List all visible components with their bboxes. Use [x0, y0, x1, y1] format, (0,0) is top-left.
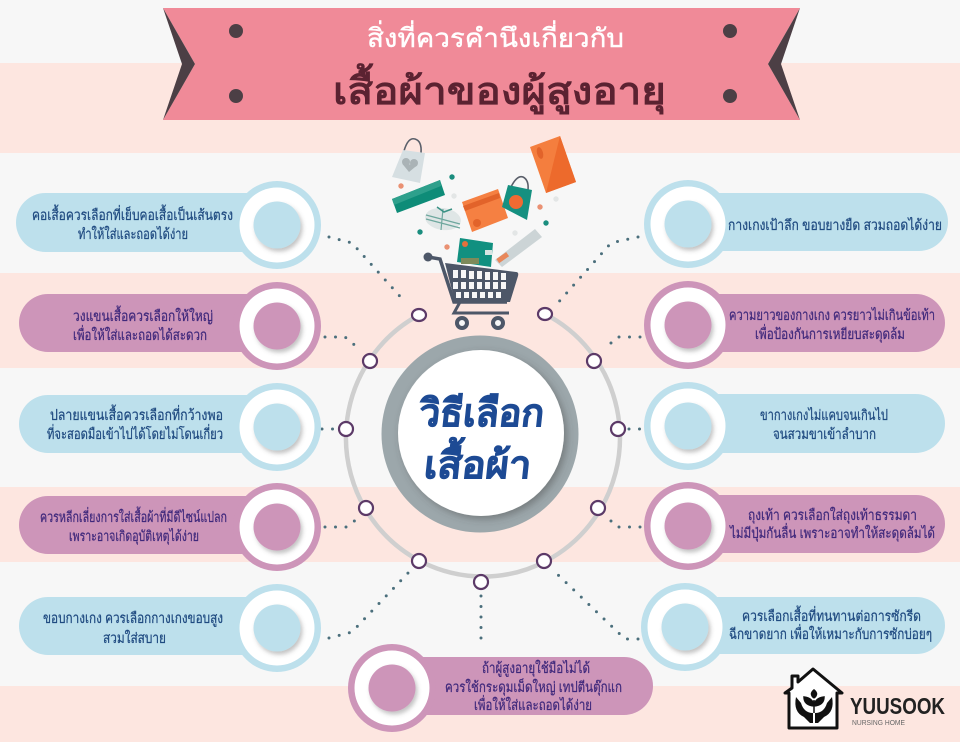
- panel: durable fabric: [641, 583, 945, 671]
- dotted connectors: [322, 237, 642, 646]
- text: armhole: เพื่อให้ใส่และถอดได้สะดวก: [73, 325, 207, 344]
- title line 2: เสื้อผ้าของผู้สูงอายุ: [333, 63, 666, 115]
- icon: green box: [392, 180, 445, 213]
- text: socks: ถุงเท้า ควรเลือกใส่ถุงเท้าธรรมดา: [748, 506, 917, 524]
- icon: wrapped gift: [424, 206, 462, 232]
- panel: armhole: [19, 282, 321, 370]
- text: buttons: เพื่อให้ใส่และถอดได้ง่าย: [474, 695, 592, 714]
- icon: orange parcel: [530, 136, 576, 193]
- text: armhole: วงแขนเสื้อควรเลือกให้ใหญ่: [73, 305, 213, 325]
- text: trouser legs: ขากางเกงไม่แคบจนเกินไป: [760, 406, 888, 424]
- text: trouser legs: จนสวมขาเข้าลำบาก: [773, 426, 876, 443]
- panel: waistband: [19, 584, 321, 672]
- text: sleeve end: ปลายแขนเสื้อควรเลือกที่กว้างพอ: [50, 404, 223, 424]
- panel: odd designs: [19, 483, 321, 571]
- center disc: [382, 336, 578, 532]
- text: waistband: ขอบกางเกง ควรเลือกกางเกงขอบสูง: [43, 610, 223, 627]
- text: durable fabric: ควรเลือกเสื้อที่ทนทานต่อการซักรีด: [742, 605, 921, 625]
- text: odd designs: เพราะอาจเกิดอุบัติเหตุได้ง่าย: [69, 527, 199, 545]
- center heading line 1: วิธีเลือก: [416, 393, 546, 435]
- icon: grey bag: [392, 139, 425, 183]
- center heading line 2: เสื้อผ้า: [422, 437, 534, 487]
- icon: teal bag: [502, 177, 532, 220]
- banner left fold: [163, 8, 195, 120]
- text: collar: คอเสื้อควรเลือกที่เย็บคอเสื้อเป็นเส้นตรง: [32, 204, 233, 224]
- icon: shopping cart: [424, 252, 518, 328]
- panel: buttons: [348, 644, 653, 732]
- icon: white card: [495, 229, 542, 267]
- text: waistband: สวมใส่สบาย: [103, 629, 166, 647]
- ring nodes: [339, 308, 625, 589]
- text: buttons: ถ้าผู้สูงอายุใช้มือไม่ได้: [482, 659, 590, 677]
- text: trouser length: เพื่อป้องกันการเหยียบสะดุดล้ม: [755, 324, 905, 343]
- banner ribbon: [163, 8, 800, 120]
- icon: house with hands and plant: [785, 669, 842, 728]
- title line 1: สิ่งที่ควรคำนึงเกี่ยวกับ: [367, 20, 624, 53]
- icon: green card box: [457, 238, 493, 267]
- panel: sleeve end: [19, 383, 321, 471]
- text: collar: ทำให้ใส่และถอดได้ง่าย: [78, 225, 188, 243]
- logo tagline: NURSING HOME: [852, 718, 905, 727]
- text: odd designs: ควรหลีกเลี่ยงการใส่เสื้อผ้าที่มีดีไซน์แปลก: [40, 506, 227, 526]
- panel: trouser length: [644, 281, 945, 369]
- banner right fold: [768, 8, 800, 120]
- banner pins: [229, 24, 737, 103]
- title banner: [163, 8, 800, 120]
- panel: trouser legs: [644, 382, 945, 470]
- outer ring: [346, 314, 620, 577]
- confetti dots: [398, 174, 559, 250]
- text: sleeve end: ที่จะสอดมือเข้าไปได้โดยไม่โดนเกี่ยว: [47, 424, 223, 443]
- panel: collar: [16, 181, 321, 269]
- icon: orange box: [462, 189, 508, 232]
- panel: trouser crotch: [644, 180, 948, 268]
- icon: falling shopping items: [392, 136, 576, 267]
- panel: socks: [644, 482, 945, 570]
- logo: Yuusook Nursing Home: [785, 669, 945, 728]
- text: buttons: ควรใช้กระดุมเม็ดใหญ่ เทปตีนตุ๊กแก: [445, 677, 622, 696]
